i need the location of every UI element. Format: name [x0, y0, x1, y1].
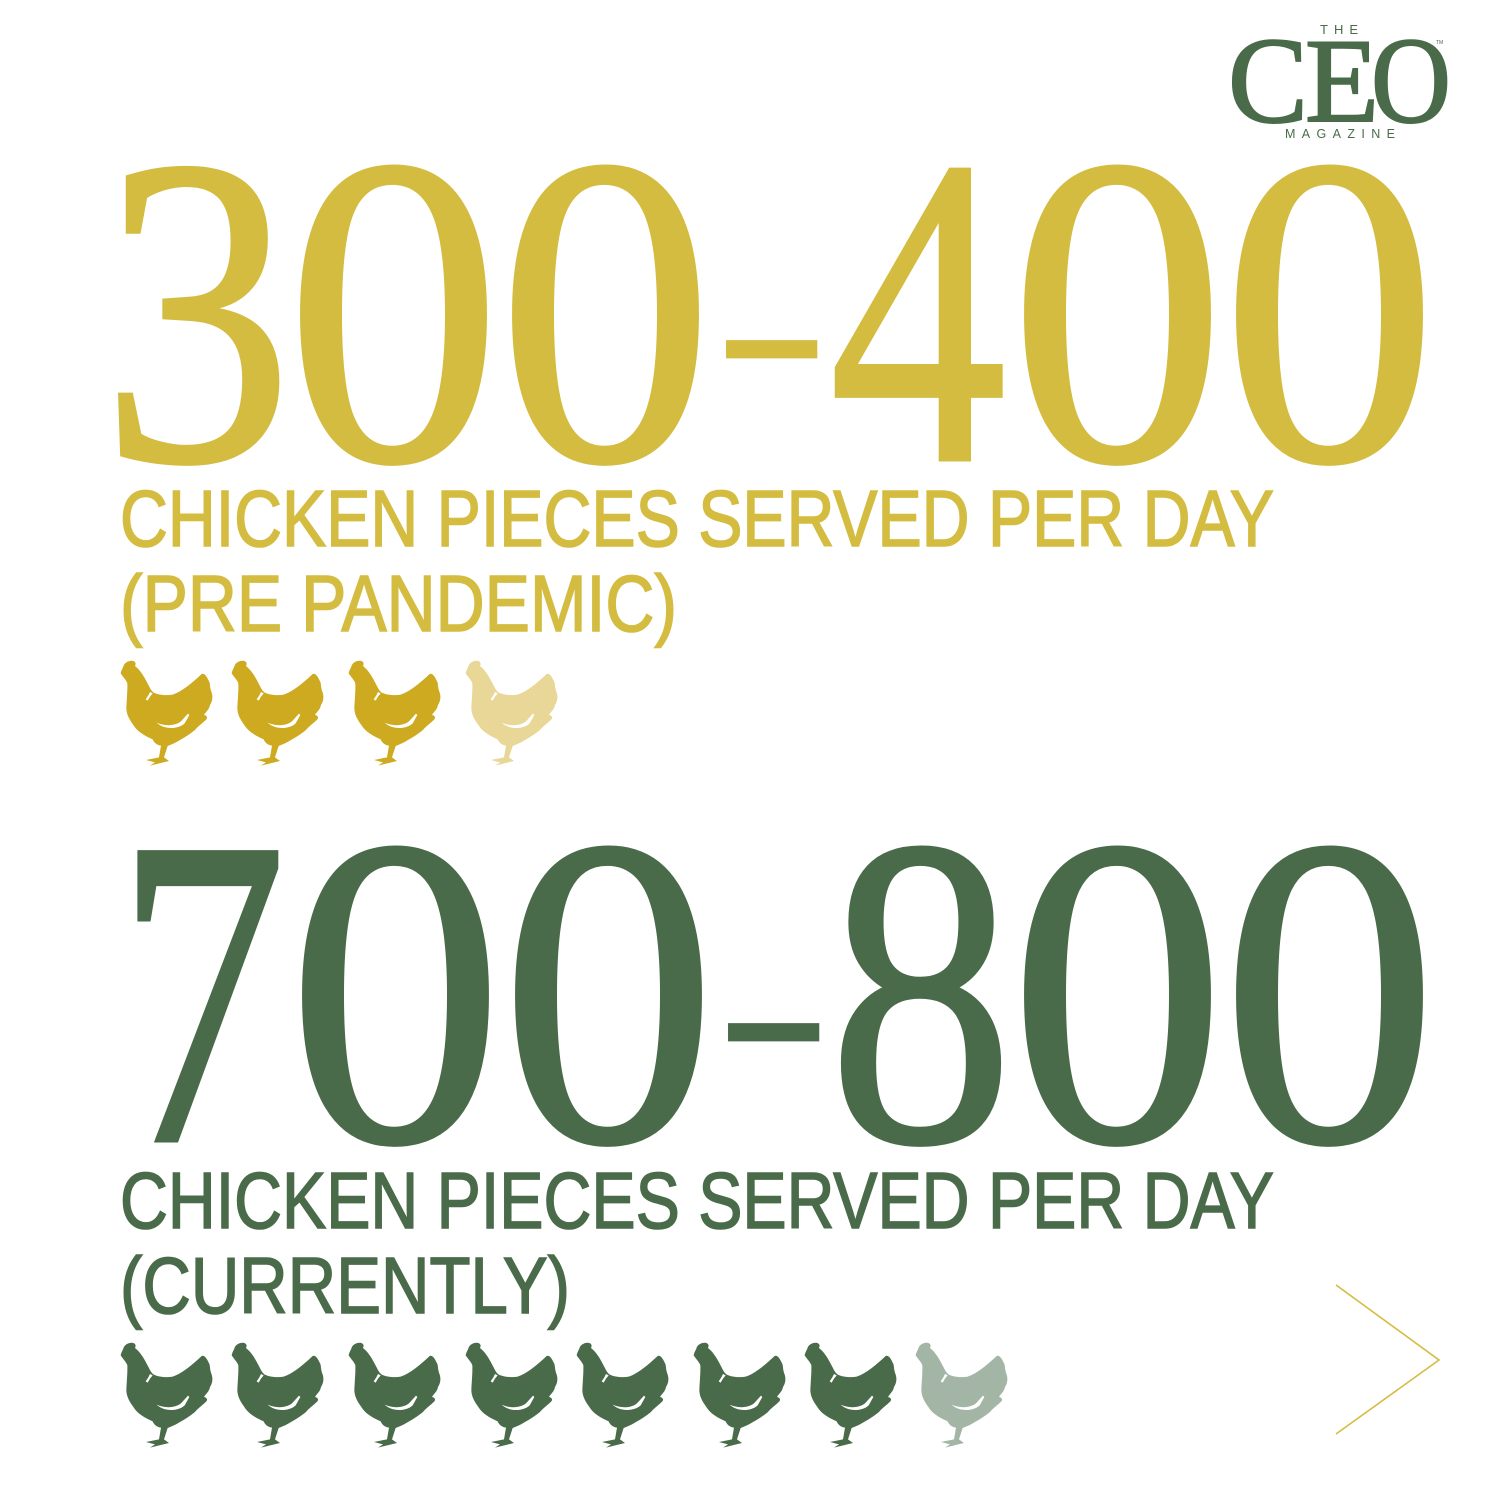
- icons: green chickens: [121, 1343, 1007, 1448]
- big number: 300-400: [101, 66, 1438, 556]
- big number: 300-400: 0: [1221, 66, 1438, 556]
- logo: The CEO Magazine: E: [1305, 14, 1379, 147]
- big number: 300-400: 4: [829, 66, 1007, 556]
- logo: The CEO Magazine: O: [1371, 12, 1451, 149]
- label: chicken pieces currently: (CURRENTLY): [120, 1241, 570, 1330]
- big number: 700-800: -: [715, 872, 832, 1143]
- label: chicken pieces currently: CHICKEN PIECES SERVED PER DAY: [120, 1156, 1274, 1245]
- big number: 700-800: 7: [116, 747, 287, 1237]
- big number: 700-800: [116, 747, 1438, 1237]
- icons: gold chickens: [121, 661, 557, 766]
- logo: The CEO Magazine: THE: [1320, 22, 1358, 37]
- big number: 300-400: 3: [101, 66, 293, 556]
- big number: 700-800: 0: [287, 747, 504, 1237]
- big number: 700-800: 8: [828, 747, 1014, 1237]
- logo: The CEO Magazine: TM: [1436, 40, 1443, 46]
- big number: 300-400: 0: [1009, 66, 1226, 556]
- logo: The CEO Magazine: C: [1228, 12, 1308, 149]
- label: chicken pieces pre pandemic: CHICKEN PIECES SERVED PER DAY: [120, 474, 1274, 563]
- arrow: next: [1336, 1285, 1439, 1434]
- big number: 700-800: 0: [1009, 747, 1226, 1237]
- big number: 700-800: 0: [1221, 747, 1438, 1237]
- label: chicken pieces pre pandemic: (PRE PANDEMIC): [120, 559, 677, 648]
- big number: 300-400: 0: [285, 66, 502, 556]
- label: chicken pieces currently: [120, 1156, 1274, 1330]
- big number: 700-800: 0: [500, 747, 717, 1237]
- logo: The CEO Magazine: [1228, 12, 1451, 149]
- logo: The CEO Magazine: MAGAZINE: [1285, 127, 1395, 141]
- big number: 300-400: -: [713, 189, 830, 460]
- big number: 300-400: 0: [497, 66, 714, 556]
- label: chicken pieces pre pandemic: [120, 474, 1274, 648]
